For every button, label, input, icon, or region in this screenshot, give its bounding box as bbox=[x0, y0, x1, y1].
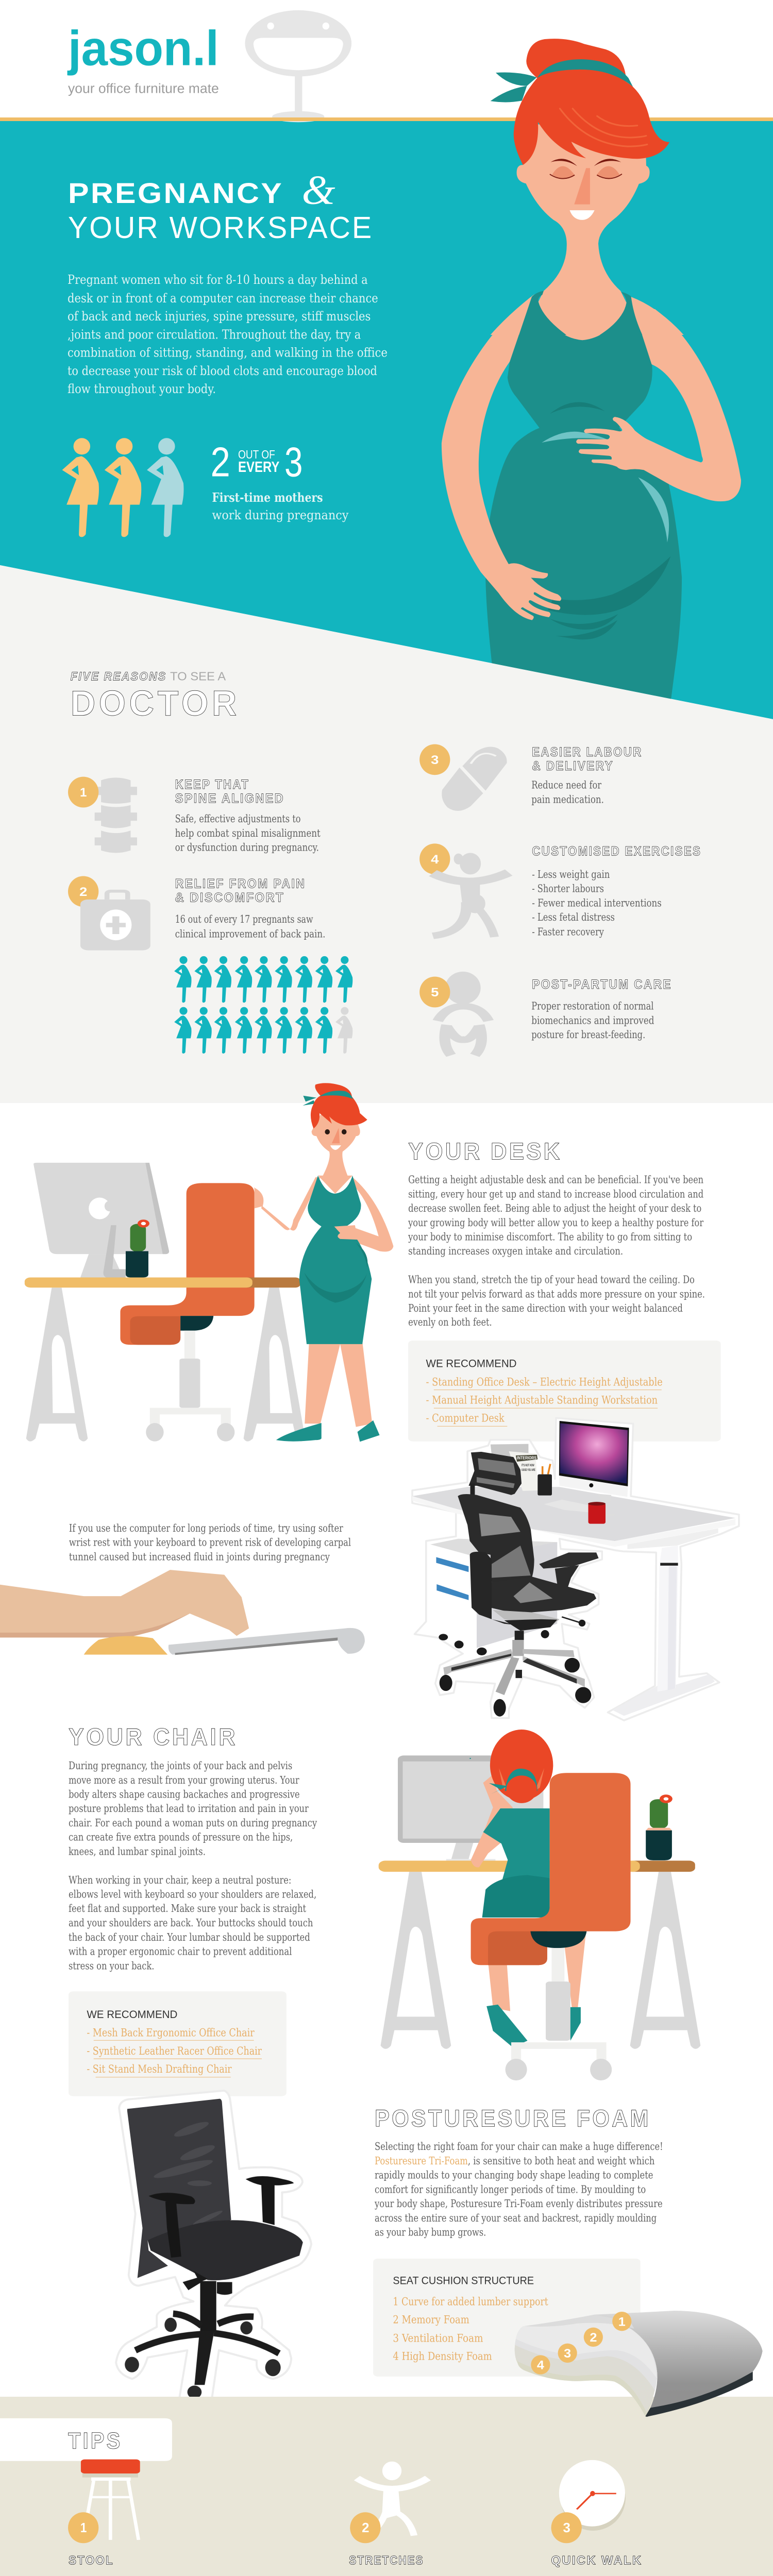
neck and face bbox=[312, 1115, 360, 1194]
books: GOOD YOU ARE bbox=[522, 1468, 535, 1472]
cushion badges: 3 bbox=[564, 2347, 571, 2361]
hair ties bbox=[491, 72, 537, 102]
raised arm bbox=[471, 1774, 513, 1867]
heading: doctor: DOCTOR bbox=[71, 683, 240, 723]
recommend links bbox=[426, 1376, 663, 1426]
upper hand bbox=[334, 1225, 358, 1240]
paragraph: posture bbox=[69, 1874, 316, 1972]
cushion badges: 2 bbox=[590, 2331, 597, 2345]
icon: stretching figure bbox=[433, 853, 509, 937]
recommend links: - Sit Stand Mesh Drafting Chair bbox=[87, 2063, 232, 2075]
keyboard bbox=[544, 1500, 590, 1512]
hair strands bbox=[560, 109, 647, 146]
structure list: 2 Memory Foam bbox=[393, 2314, 469, 2326]
paragraph: posture: When working in your chair, keep a neutral posture: bbox=[69, 1874, 291, 1887]
icon: egg chair bbox=[245, 10, 351, 122]
body 5: posture for breast-feeding. bbox=[531, 1028, 645, 1041]
paragraph: joints: can create five extra pounds of pressure on the hips, bbox=[69, 1832, 293, 1843]
shoulders bbox=[491, 294, 684, 335]
heading: five reasons: FIVE REASONS bbox=[71, 669, 166, 683]
books bbox=[491, 1444, 539, 1491]
wheels bbox=[440, 1675, 452, 1691]
badge 3: 3 bbox=[431, 753, 439, 767]
badge 4: 4 bbox=[431, 853, 439, 867]
heading 1: SPINE ALIGNED bbox=[175, 791, 284, 806]
dress bbox=[299, 1176, 372, 1344]
recommend links: - Computer Desk bbox=[426, 1412, 505, 1425]
recommend links: - Mesh Back Ergonomic Office Chair bbox=[87, 2027, 255, 2039]
section: five reasons to see a doctor: or dysfunction during pregnancy. bbox=[175, 841, 319, 854]
nose bbox=[574, 168, 590, 205]
badge: tip 1: 1 bbox=[80, 2520, 87, 2535]
illustration: pregnant woman bbox=[442, 39, 741, 719]
foam layer 1 bbox=[516, 2323, 657, 2379]
illustration: hand, wrist rest and keyboard bbox=[0, 1570, 365, 1655]
badge 2: 2 bbox=[79, 885, 87, 899]
standing woman bbox=[254, 1083, 393, 1442]
cushion badges bbox=[531, 2312, 631, 2375]
cushion badges: 1 bbox=[618, 2315, 626, 2329]
recommend heading: WE RECOMMEND bbox=[426, 1357, 517, 1369]
title line one: PREGNANCY bbox=[68, 178, 283, 210]
body 4 list bbox=[532, 868, 662, 938]
nose bbox=[332, 1128, 340, 1143]
shoes bbox=[276, 1420, 380, 1442]
paragraph: wrist rest: tunnel caused but increased fluid in joints during pregnancy bbox=[69, 1551, 330, 1563]
mechanism bbox=[493, 1610, 560, 1627]
intro paragraph: ,joints and poor circulation. Throughout the day, try a bbox=[68, 327, 361, 342]
logo wordmark: jason.l bbox=[67, 21, 219, 76]
body 5 bbox=[531, 999, 654, 1041]
intro paragraph: desk or in front of a computer can increase their chance bbox=[68, 291, 378, 306]
section: tips bbox=[0, 2418, 642, 2567]
heading 3: & DELIVERY bbox=[532, 759, 614, 773]
books: INTERIORS bbox=[517, 1455, 536, 1461]
chair bbox=[120, 1183, 255, 1442]
keyboard bbox=[169, 1628, 365, 1655]
skirt bbox=[482, 1875, 550, 1918]
reason 2: pain: 16 out of every 17 pregnants saw bbox=[175, 913, 313, 925]
dress bbox=[483, 1808, 550, 1882]
hand bbox=[0, 1570, 249, 1637]
recommend links bbox=[87, 2027, 262, 2077]
paragraph: joints bbox=[69, 1760, 317, 1858]
recommend links: - Synthetic Leather Racer Office Chair bbox=[87, 2045, 262, 2057]
shoes bbox=[486, 2005, 581, 2047]
paragraph: standing posture: evenly on both feet. bbox=[408, 1316, 492, 1329]
intro paragraph: to decrease your risk of blood clots and encourage blood bbox=[68, 363, 377, 378]
arms bbox=[254, 1177, 393, 1252]
structure list bbox=[393, 2296, 548, 2363]
badge 4 bbox=[419, 843, 450, 874]
intro paragraph: flow throughout your body. bbox=[68, 381, 216, 396]
tips band bbox=[0, 2397, 773, 2576]
heading: five reasons: TO SEE A bbox=[170, 669, 226, 683]
dress straps bbox=[519, 291, 642, 335]
smile bbox=[330, 1145, 341, 1150]
section: five reasons to see a doctor: help combat spinal misalignment bbox=[175, 827, 321, 839]
chair base bbox=[506, 2046, 612, 2080]
badge: tip 2: 2 bbox=[362, 2520, 369, 2535]
smile bbox=[569, 210, 595, 220]
badge 3 bbox=[419, 744, 450, 775]
hair ties bbox=[303, 1096, 316, 1106]
section: five reasons to see a doctor bbox=[68, 669, 701, 1055]
title ampersand: & bbox=[301, 167, 335, 213]
paragraph: posture: with a proper ergonomic chair to prevent additional bbox=[69, 1945, 292, 1958]
sticker outline bbox=[412, 1418, 739, 1720]
seat bbox=[147, 2220, 303, 2280]
cushion base bbox=[645, 2371, 753, 2417]
heading: your desk: YOUR DESK bbox=[408, 1139, 562, 1165]
body 1 bbox=[175, 812, 321, 854]
paragraph: standing posture bbox=[408, 1274, 705, 1329]
panel: seat cushion structure bbox=[373, 2259, 641, 2377]
heading 2: & DISCOMFORT bbox=[175, 891, 284, 905]
paragraph: foam: Posturesure Tri-Foam bbox=[375, 2155, 468, 2167]
drawer pedestal bbox=[430, 1539, 557, 1655]
dress bbox=[485, 309, 682, 719]
logo tagline: your office furniture mate bbox=[68, 81, 219, 96]
badge: tip 3 bbox=[551, 2512, 582, 2543]
pen cup bbox=[537, 1464, 552, 1496]
stat: 2 out of every 3: OUT OF bbox=[238, 448, 275, 461]
stat: 2 out of every 3 bbox=[210, 439, 303, 485]
headband bbox=[320, 1091, 353, 1099]
illustration: seated woman from behind bbox=[379, 1730, 700, 2080]
structure list: 4 High Density Foam bbox=[393, 2350, 492, 2363]
office chair bbox=[440, 1452, 599, 1717]
woman head and shoulders bbox=[491, 39, 684, 335]
red mug bbox=[588, 1502, 617, 1524]
hair bbox=[311, 1083, 367, 1129]
icons: two of three pregnant women bbox=[62, 438, 183, 537]
desk trestles bbox=[26, 1287, 305, 1442]
books: IT'S NOT HOW bbox=[522, 1464, 534, 1467]
hand on chair bbox=[255, 1188, 263, 1209]
stat: 2 out of every 3: 2 bbox=[210, 439, 230, 485]
mesh highlights bbox=[153, 2119, 224, 2227]
left arm and lower hand bbox=[442, 309, 561, 620]
headrest bbox=[468, 1452, 522, 1495]
legs bbox=[488, 1936, 585, 2011]
chest bbox=[541, 309, 625, 340]
tips heading tab: TIPS bbox=[68, 2428, 122, 2454]
structure heading: SEAT CUSHION STRUCTURE bbox=[393, 2274, 534, 2286]
header and logo bbox=[67, 10, 351, 122]
desk trestles bbox=[381, 1872, 700, 2049]
monitor back bbox=[33, 1163, 169, 1277]
stat: 2 out of every 3: 3 bbox=[284, 439, 303, 485]
star base bbox=[136, 2314, 279, 2353]
tips heading tab bbox=[0, 2418, 172, 2461]
cactus bbox=[126, 1219, 149, 1277]
icon: clock bbox=[559, 2460, 626, 2531]
intro paragraph bbox=[68, 272, 388, 396]
foam layer 4 bbox=[515, 2323, 658, 2416]
illustration: desk scene with standing woman bbox=[25, 1083, 393, 1442]
paragraph: posture: elbows level with keyboard so your shoulders are relaxed, bbox=[69, 1889, 316, 1901]
heading 2 bbox=[175, 877, 306, 905]
intro paragraph: combination of sitting, standing, and walking in the office bbox=[68, 345, 388, 360]
stat caption: First-time mothers bbox=[212, 490, 323, 505]
reason 3: labour: Reduce need for bbox=[531, 779, 601, 791]
panel: chair recommendations bbox=[69, 1991, 287, 2096]
recommend heading: WE RECOMMEND bbox=[87, 2008, 177, 2021]
tip labels: STRETCHES bbox=[349, 2553, 424, 2567]
badge 5 bbox=[419, 977, 450, 1007]
paragraph: foam bbox=[374, 2141, 663, 2239]
closed eyes bbox=[550, 159, 622, 179]
icon: spine bbox=[95, 777, 137, 853]
wheels bbox=[125, 2318, 281, 2399]
reason 3: labour: pain medication. bbox=[531, 793, 604, 806]
badge 1 bbox=[68, 777, 98, 807]
paragraph: foam: as your baby bump grows. bbox=[375, 2226, 486, 2239]
belly shading bbox=[548, 402, 670, 639]
foam cushion diagram bbox=[515, 2311, 763, 2417]
face and neck bbox=[517, 124, 650, 335]
photo: standing desk workstation bbox=[412, 1418, 739, 1720]
backrest bbox=[458, 1494, 534, 1608]
body 4 list: - Faster recovery bbox=[532, 925, 604, 938]
orange header stripe bbox=[0, 117, 773, 121]
intro paragraph: Pregnant women who sit for 8-10 hours a day behind a bbox=[68, 272, 368, 287]
right armrest bbox=[246, 2176, 294, 2225]
body 4 list: - Less weight gain bbox=[532, 868, 610, 880]
body 2 bbox=[175, 913, 325, 940]
desktop bbox=[412, 1487, 735, 1549]
sticker outline bbox=[116, 2091, 311, 2399]
photo: mesh office chair bbox=[116, 2091, 311, 2399]
icon: mother and baby bbox=[438, 972, 489, 1055]
paragraph: posture: stress on your back. bbox=[69, 1960, 154, 1972]
tip labels: QUICK WALK bbox=[551, 2553, 642, 2567]
icon: stretching figure bbox=[357, 2462, 428, 2536]
wrist rest bbox=[84, 1636, 167, 1655]
body 1: Safe, effective adjustments to bbox=[175, 812, 301, 825]
paragraph: posture: the back of your chair. Your lumbar should be supported bbox=[69, 1931, 310, 1944]
cushion badges: 4 bbox=[537, 2359, 544, 2372]
badge: tip 1 bbox=[68, 2512, 98, 2543]
foam layer 2 bbox=[515, 2323, 658, 2391]
paragraph: wrist rest: wrist rest with your keyboard to prevent risk of developing carpal bbox=[69, 1536, 351, 1549]
chair bbox=[471, 1773, 631, 2041]
reason 2: pain bbox=[68, 876, 352, 1054]
badge: tip 2 bbox=[350, 2512, 381, 2543]
legs bbox=[305, 1342, 372, 1427]
paragraph: desk height bbox=[408, 1174, 703, 1257]
armrest bbox=[539, 1552, 599, 1569]
paragraph: joints: body alters shape causing backaches and progressive bbox=[69, 1789, 300, 1801]
belly highlights bbox=[542, 432, 669, 543]
badge 2 bbox=[68, 876, 98, 907]
heading 3: EASIER LABOUR bbox=[532, 745, 642, 759]
icon: stool bbox=[81, 2460, 140, 2540]
stat caption bbox=[212, 490, 349, 522]
tip labels: STOOL bbox=[69, 2553, 114, 2567]
monitor bbox=[559, 1421, 629, 1504]
left armrest bbox=[148, 2193, 195, 2258]
tip labels bbox=[69, 2553, 642, 2567]
heading 3 bbox=[532, 745, 642, 773]
headband ties bbox=[489, 1783, 508, 1794]
reason 5: post-partum bbox=[419, 972, 672, 1055]
body 4 list: - Shorter labours bbox=[532, 883, 604, 895]
hair bbox=[490, 1730, 553, 1801]
hero: title and intro bbox=[62, 167, 388, 537]
paragraph: joints: chair. For each pound a woman puts on during pregnancy bbox=[69, 1817, 317, 1829]
hair bbox=[514, 70, 669, 165]
section: posturesure foam bbox=[373, 2106, 663, 2377]
section: your chair bbox=[69, 1724, 700, 2096]
right arm and upper hand bbox=[576, 309, 741, 501]
headband bbox=[505, 1769, 537, 1791]
title line two: YOUR WORKSPACE bbox=[68, 211, 373, 245]
icon: pill bbox=[442, 747, 507, 811]
intro paragraph: of back and neck injuries, spine pressure, stiff muscles bbox=[68, 309, 371, 324]
headband bbox=[537, 59, 633, 87]
hair bun bbox=[526, 39, 626, 83]
paragraph: joints: knees, and lumbar spinal joints. bbox=[69, 1846, 206, 1858]
badge 1: 1 bbox=[80, 786, 87, 800]
structure list: 3 Ventilation Foam bbox=[393, 2332, 483, 2345]
gas lift and lever bbox=[182, 2271, 232, 2331]
backrest bbox=[127, 2099, 231, 2278]
cactus bbox=[646, 1794, 673, 1860]
stat: 2 out of every 3: EVERY bbox=[238, 459, 279, 475]
desktop bbox=[25, 1277, 300, 1287]
heading 2: RELIEF FROM PAIN bbox=[175, 877, 306, 891]
structure list: 1 Curve for added lumber support bbox=[393, 2296, 548, 2308]
cushion top edge bbox=[524, 2315, 634, 2329]
desk leg bbox=[612, 1546, 715, 1716]
paragraph: wrist rest: If you use the computer for long periods of time, try using softer bbox=[69, 1522, 343, 1535]
body 3 bbox=[531, 779, 604, 806]
paragraph: wrist rest bbox=[69, 1522, 351, 1563]
paragraph: posture: and your shoulders are back. Your buttocks should touch bbox=[69, 1917, 313, 1929]
foam layer 3 bbox=[515, 2323, 658, 2412]
stat caption: work during pregnancy bbox=[212, 507, 349, 522]
heading: your chair: YOUR CHAIR bbox=[69, 1724, 238, 1750]
reason 4: exercises bbox=[419, 843, 701, 938]
pictogram: 16 of 17 bbox=[174, 956, 352, 1054]
heading 1 bbox=[175, 777, 284, 806]
hair highlights bbox=[499, 1768, 544, 1791]
desktop bbox=[379, 1860, 695, 1872]
eyes bbox=[325, 1129, 347, 1134]
woman body bbox=[442, 309, 741, 719]
paragraph: posture: feet flat and supported. Make sure your back is straight bbox=[69, 1903, 306, 1914]
heading 1: KEEP THAT bbox=[175, 777, 249, 792]
seat bbox=[491, 1577, 596, 1614]
reason 3: labour bbox=[419, 744, 642, 811]
section: your desk bbox=[0, 1083, 721, 1655]
monitor bbox=[398, 1755, 543, 1861]
paragraph: joints: posture problems that lead to irritation and pain in your bbox=[69, 1803, 309, 1815]
badge 5: 5 bbox=[431, 986, 439, 999]
hair bun bbox=[506, 1775, 537, 1803]
paragraph: joints: move more as a result from your growing uterus. Your bbox=[69, 1774, 299, 1787]
paragraph: joints: During pregnancy, the joints of your back and pelvis bbox=[69, 1760, 292, 1772]
body 4 list: - Less fetal distress bbox=[532, 911, 615, 923]
reason 1: spine bbox=[68, 777, 321, 854]
reason 2: pain: clinical improvement of back pain. bbox=[175, 927, 325, 940]
panel: desk recommendations bbox=[408, 1341, 721, 1442]
icon: medical kit bbox=[80, 891, 150, 951]
cushion body bbox=[594, 2311, 763, 2408]
badge: tip 3: 3 bbox=[563, 2520, 570, 2535]
star base bbox=[515, 1631, 524, 1641]
